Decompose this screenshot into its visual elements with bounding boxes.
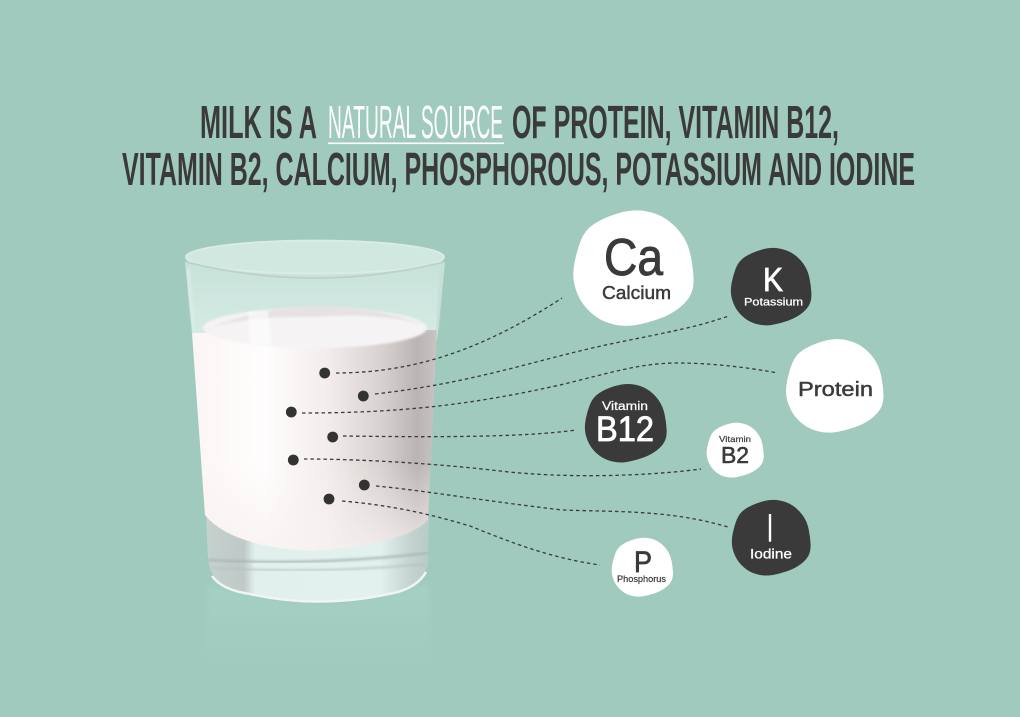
title: MILK IS A	[200, 96, 317, 148]
badge: iodine: Iodine	[750, 546, 792, 562]
badge: potassium: Potassium	[744, 296, 803, 308]
glass rim	[186, 240, 444, 274]
connector: vitamin B2	[304, 459, 701, 476]
milk body	[192, 330, 437, 551]
badge: phosphorus: Phosphorus	[617, 574, 666, 584]
title	[122, 96, 915, 195]
glass reflection	[204, 584, 434, 680]
badge: protein: Protein	[798, 379, 873, 401]
badge: vitamin B2	[707, 423, 764, 478]
milk surface	[203, 308, 427, 348]
badge: vitamin B2: B2	[721, 442, 749, 468]
badge: calcium: Ca	[604, 229, 663, 287]
glass of milk	[185, 240, 445, 680]
badge: phosphorus	[612, 538, 673, 597]
badge: iodine	[732, 500, 811, 576]
dots	[286, 368, 370, 504]
badge: vitamin B12: Vitamin	[602, 401, 648, 413]
badge: phosphorus: P	[634, 546, 652, 579]
badge: calcium	[573, 210, 694, 326]
connector: phosphorus	[342, 501, 600, 565]
badge: potassium	[731, 248, 811, 325]
title: NATURAL SOURCE	[328, 96, 503, 148]
connector: calcium	[336, 298, 562, 373]
badge: iodine: I	[768, 508, 772, 550]
badge: calcium: Calcium	[602, 283, 671, 303]
badge: potassium: K	[763, 261, 783, 298]
connector: vitamin B12	[343, 430, 576, 437]
badge: vitamin B12: B12	[596, 410, 654, 449]
connector: iodine	[376, 486, 728, 527]
glass base	[206, 515, 429, 602]
connector: protein	[302, 363, 778, 413]
badge: vitamin B12	[585, 384, 667, 462]
badge: protein	[786, 339, 883, 433]
connector: potassium	[375, 316, 729, 394]
badge: vitamin B2: Vitamin	[719, 434, 751, 444]
glass empty upper part	[185, 244, 445, 340]
